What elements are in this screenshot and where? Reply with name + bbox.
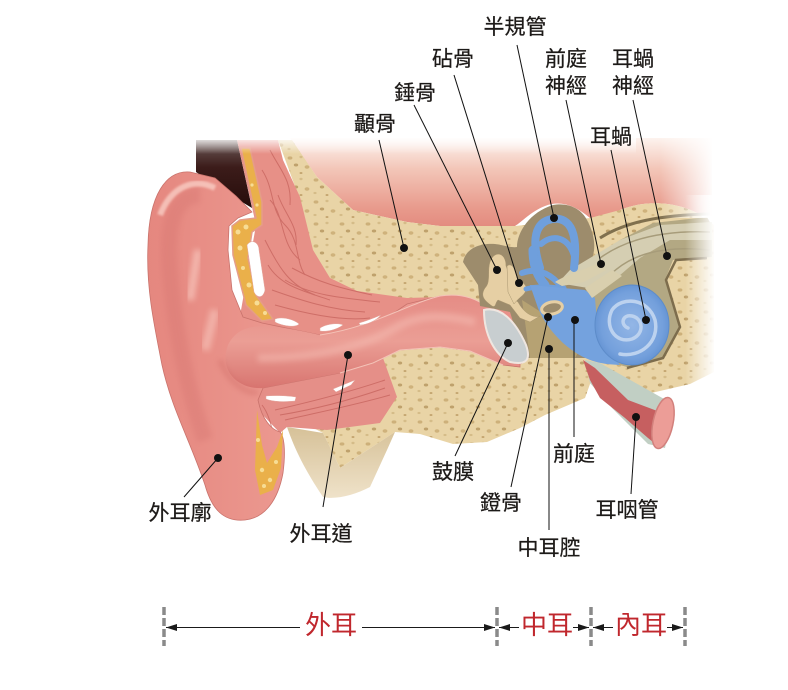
labels: 耳咽管 bbox=[596, 499, 658, 522]
labels: 中耳腔 bbox=[518, 537, 580, 560]
labels: 錘骨 bbox=[394, 82, 436, 105]
leader lines bbox=[184, 45, 667, 530]
semicircular canals bbox=[522, 219, 575, 289]
auditory canal tube bbox=[226, 295, 522, 388]
canal highlight bbox=[258, 317, 475, 358]
lower fat dots bbox=[256, 438, 278, 488]
temporal bone, whole bbox=[260, 140, 714, 468]
illustration: ear anatomy cross-section bbox=[148, 136, 715, 520]
eardrum bbox=[484, 309, 528, 363]
labels: 神經 bbox=[612, 75, 654, 98]
section labels bbox=[305, 610, 667, 640]
nerve highlights bbox=[600, 232, 710, 275]
malleus ossicle bbox=[483, 254, 540, 322]
lower canal flesh bbox=[255, 358, 397, 433]
labels: 前庭 bbox=[545, 48, 587, 71]
vestibule bbox=[530, 285, 620, 365]
section ruler: outer, middle, inner ear bbox=[164, 607, 685, 646]
edge fades bbox=[685, 195, 715, 385]
section labels: 內耳 bbox=[615, 610, 667, 640]
flesh wrinkles bbox=[262, 150, 380, 319]
stapes bbox=[540, 300, 564, 316]
nerve bundle bbox=[558, 222, 712, 298]
labels: 外耳廓 bbox=[148, 502, 212, 525]
labels: 耳蝸 bbox=[612, 48, 654, 71]
labels: 半規管 bbox=[484, 16, 546, 39]
yellow fat layer, upper bbox=[232, 148, 273, 321]
labels: 外耳道 bbox=[290, 523, 352, 546]
yellow fat layer, lower bbox=[255, 410, 283, 495]
tube opening bbox=[648, 395, 678, 451]
dark bone edge bbox=[627, 258, 707, 368]
upper canal flesh bbox=[237, 140, 440, 338]
canal rim bbox=[320, 295, 503, 373]
mastoid process bbox=[287, 427, 395, 498]
labels: 前庭 bbox=[553, 443, 595, 466]
labels: 砧骨 bbox=[432, 48, 474, 71]
labels: 鼓膜 bbox=[432, 461, 474, 484]
labels: 神經 bbox=[545, 75, 587, 98]
labels: 耳蝸 bbox=[590, 126, 632, 149]
arrowheads bbox=[166, 624, 683, 631]
dashed tick marks bbox=[164, 607, 685, 646]
section labels: 中耳 bbox=[521, 610, 573, 640]
eustachian tube lumen bbox=[583, 360, 660, 446]
dark nerve sheath bbox=[600, 214, 710, 238]
arrow lines bbox=[166, 626, 683, 628]
white cartilage pieces bbox=[247, 242, 381, 402]
helix shading bbox=[160, 184, 258, 440]
vestibular nerve branches bbox=[555, 262, 622, 298]
middle ear cavity bbox=[463, 204, 594, 358]
leader dots bbox=[214, 214, 671, 462]
upper fat dots bbox=[236, 183, 267, 315]
brain cavity bbox=[290, 138, 712, 226]
lower wrinkles bbox=[262, 380, 390, 445]
labels bbox=[148, 16, 658, 560]
nerve region bbox=[585, 217, 712, 367]
hair bbox=[196, 140, 252, 208]
cochlea bbox=[595, 285, 669, 365]
labels: 鐙骨 bbox=[480, 492, 522, 515]
section labels: 外耳 bbox=[305, 610, 357, 640]
pinna outer ear bbox=[148, 172, 520, 520]
incus bbox=[507, 265, 526, 304]
cochlea spiral bbox=[609, 301, 656, 355]
cavity floor bbox=[522, 300, 585, 358]
labels: 顳骨 bbox=[354, 113, 396, 136]
eustachian tube wall bbox=[585, 360, 673, 448]
